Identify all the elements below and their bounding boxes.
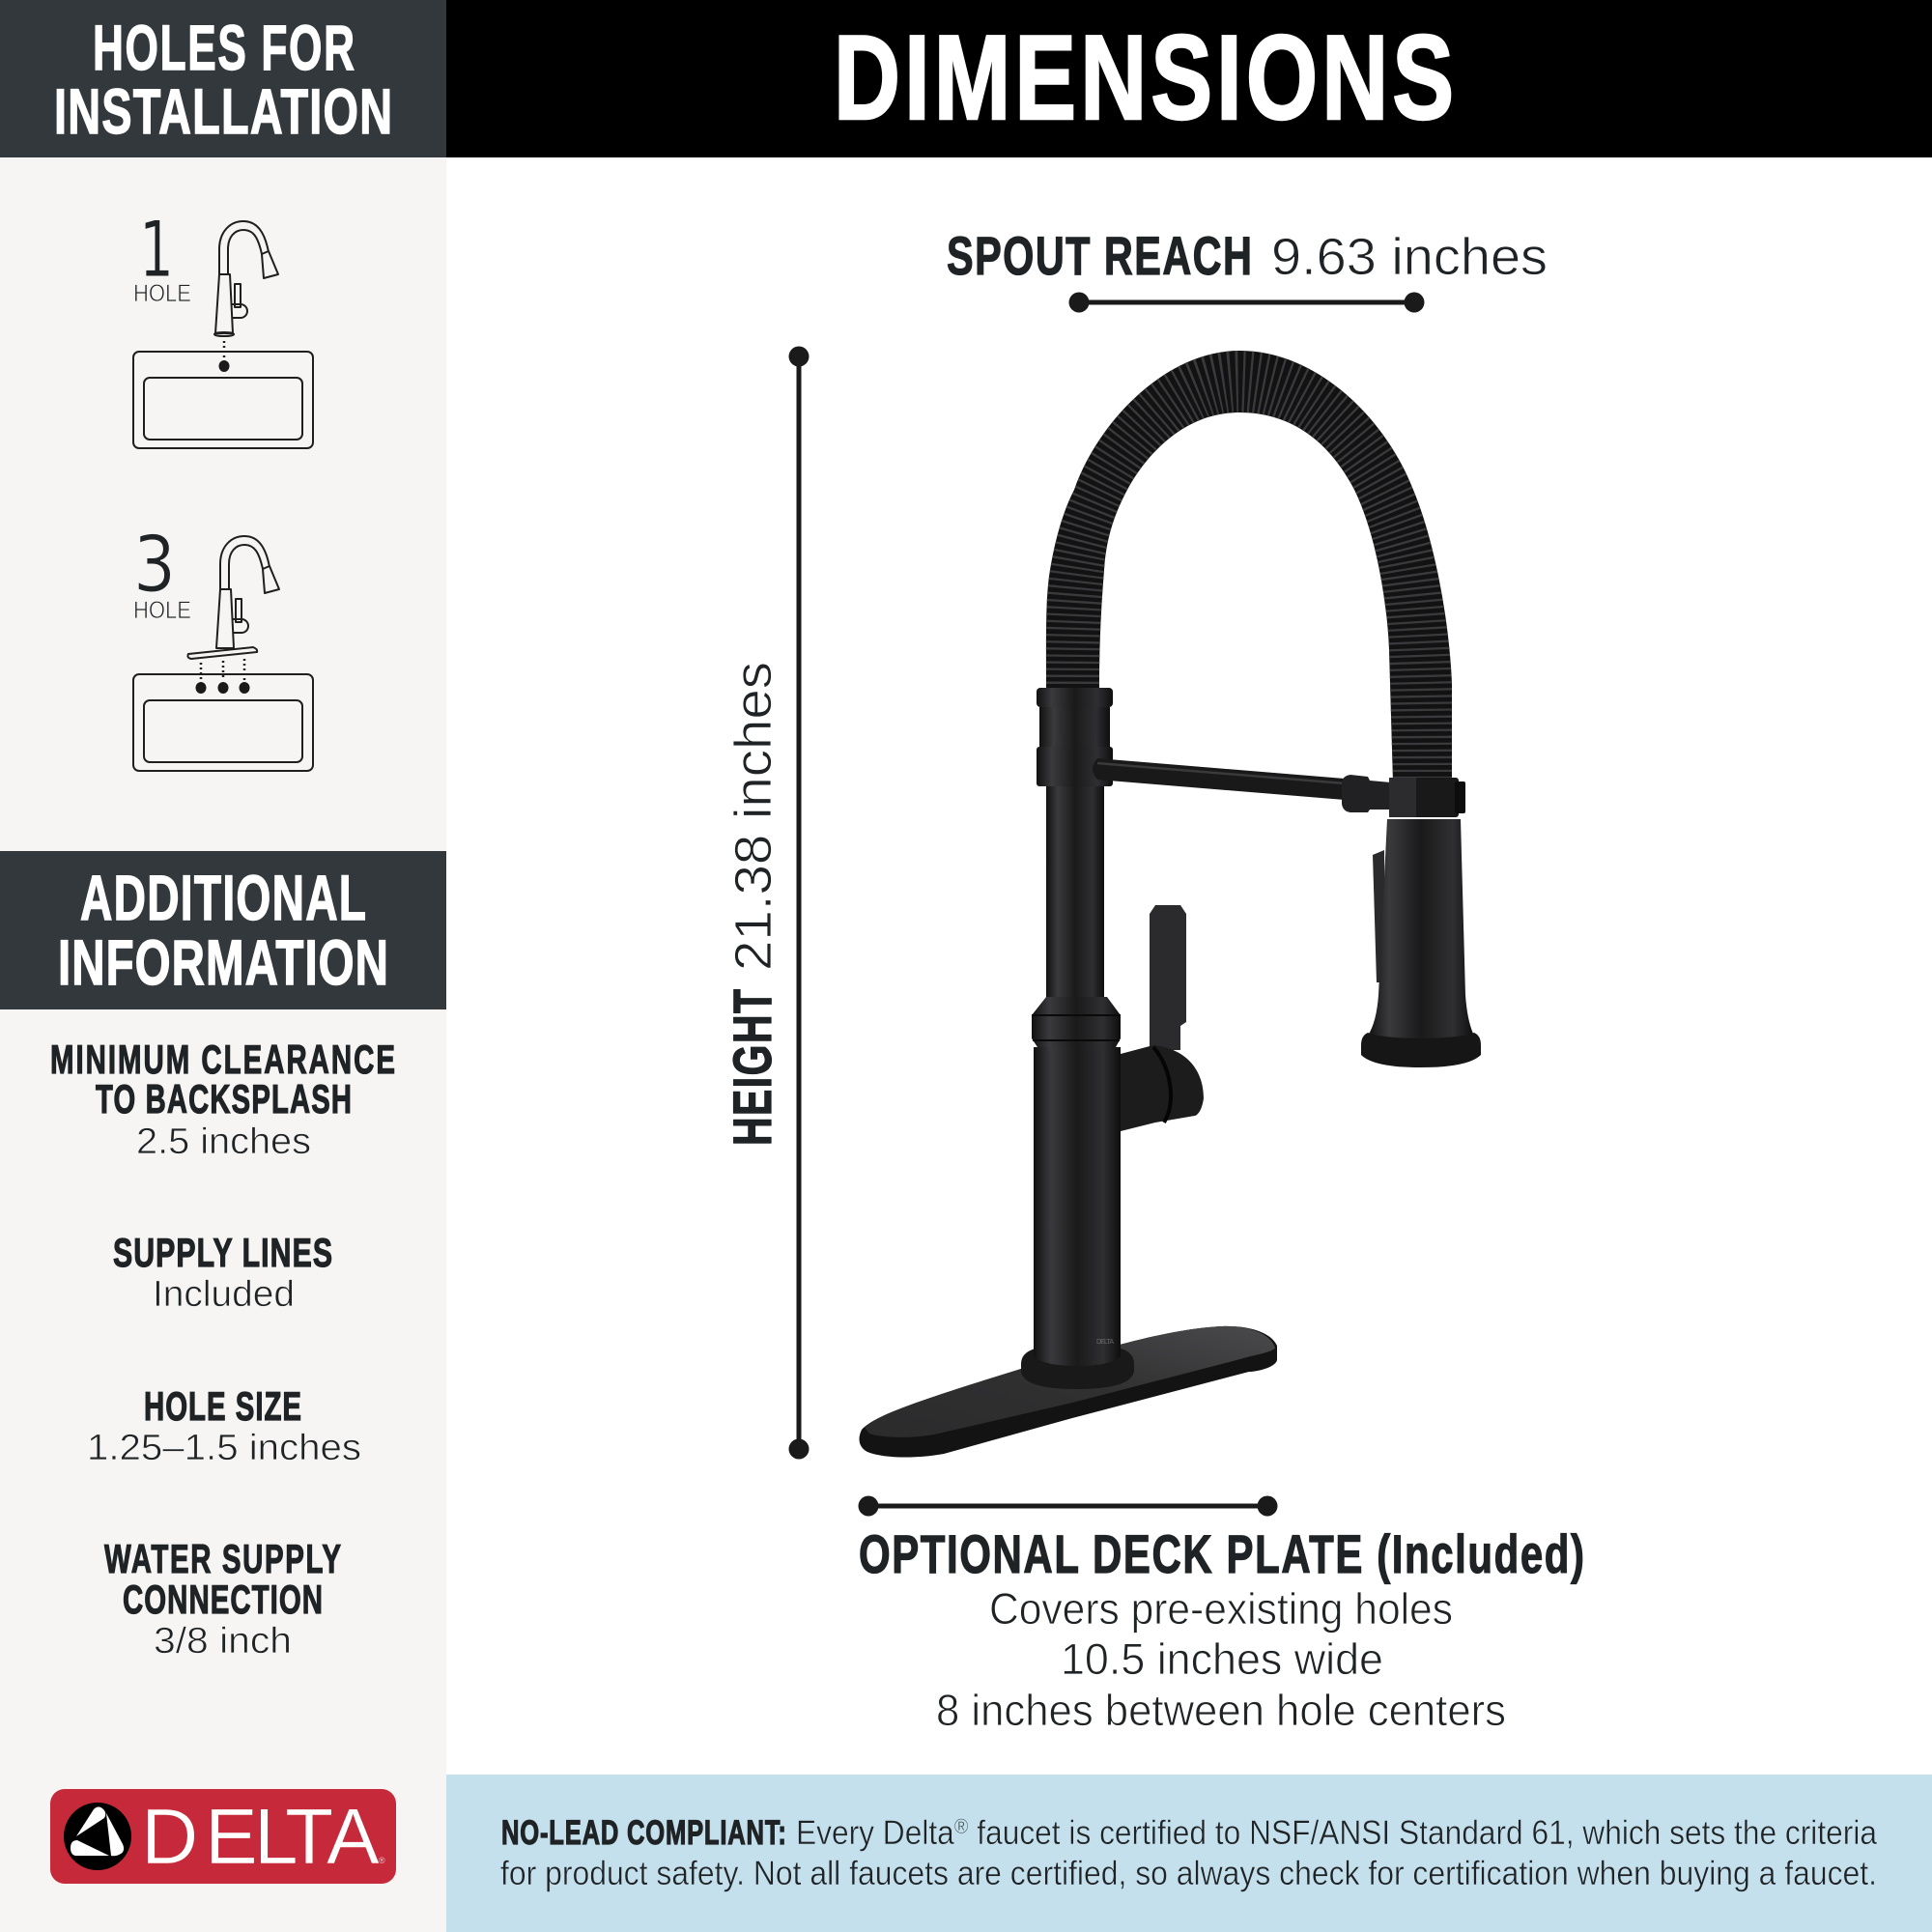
logo: delta [50,1789,396,1884]
text block: hole size [87,1383,361,1468]
heading: additional information: INFORMATION [58,927,388,999]
text block: minimum clearance: MINIMUM CLEARANCE [50,1037,395,1082]
heading: holes for installation [0,0,446,157]
heading: holes for installation: HOLES FOR [93,12,355,83]
dimension label: spout reach [947,226,1548,287]
icon: one hole installation: HOLE [133,280,191,307]
icon: one hole installation: 1 [139,205,174,295]
logo: delta: ® [379,1856,385,1865]
handle [1121,905,1204,1131]
panel: no-lead compliant note: Every Delta [796,1814,971,1852]
text block: supply lines [113,1230,332,1315]
icon: three hole installation [133,520,313,771]
text block: optional deck plate: 10.5 inches wide [1061,1634,1383,1684]
text block: supply lines: Included [153,1274,295,1315]
text block: supply lines: SUPPLY LINES [113,1230,332,1275]
heading: holes for installation: INSTALLATION [54,76,392,148]
panel: left sidebar [0,0,446,1932]
icon: one hole installation [133,205,313,448]
arrow: deck plate width [858,1495,1277,1517]
icon: three hole installation: HOLE [133,597,191,624]
title: dimensions [446,0,1932,157]
text block: minimum clearance [50,1037,395,1162]
coiled spring hose [1045,351,1452,778]
spray head [1361,778,1481,1067]
spring collar and stem [1037,688,1113,999]
text block: water supply connection: 3/8 inch [154,1621,292,1662]
text block: minimum clearance: TO BACKSPLASH [96,1076,352,1122]
text block: hole size: 1.25–1.5 inches [87,1428,361,1468]
text block: water supply connection [104,1536,341,1662]
icon: three hole installation: 3 [133,520,176,610]
faucet body [1032,997,1121,1366]
text block: optional deck plate: OPTIONAL DECK PLATE (Included) [859,1524,1584,1584]
base ring [1021,1349,1134,1389]
faucet body: DELTA [1096,1339,1114,1346]
text block: hole size: HOLE SIZE [144,1383,301,1429]
panel: no-lead compliant note [446,1775,1932,1932]
arrow: height [788,346,810,1459]
text block: water supply connection: CONNECTION [123,1577,323,1622]
dimension label: spout reach: SPOUT REACH [947,226,1252,287]
faucet illustration [860,338,1481,1458]
heading: additional information [0,851,446,1009]
text block: optional deck plate: Covers pre-existing holes [989,1584,1453,1634]
panel: no-lead compliant note: NO-LEAD COMPLIANT: [501,1814,786,1852]
dimension label: height: HEIGHT [724,989,783,1146]
logo: delta: DELTA [141,1793,380,1881]
title: dimensions: DIMENSIONS [834,12,1454,145]
support rod [1093,758,1391,812]
text block: optional deck plate [859,1524,1584,1735]
heading: additional information: ADDITIONAL [80,863,366,934]
dimension label: height [724,662,783,1146]
text block: minimum clearance: 2.5 inches [136,1122,311,1162]
panel: no-lead compliant note: ® [954,1814,968,1838]
text block: water supply connection: WATER SUPPLY [104,1536,341,1581]
arrow: spout reach [1068,292,1424,313]
deck plate [860,1326,1277,1458]
dimension label: height: 21.38 inches [724,662,782,971]
dimension label: spout reach: 9.63 inches [1271,228,1548,286]
text block: optional deck plate: 8 inches between hole centers [936,1686,1506,1735]
